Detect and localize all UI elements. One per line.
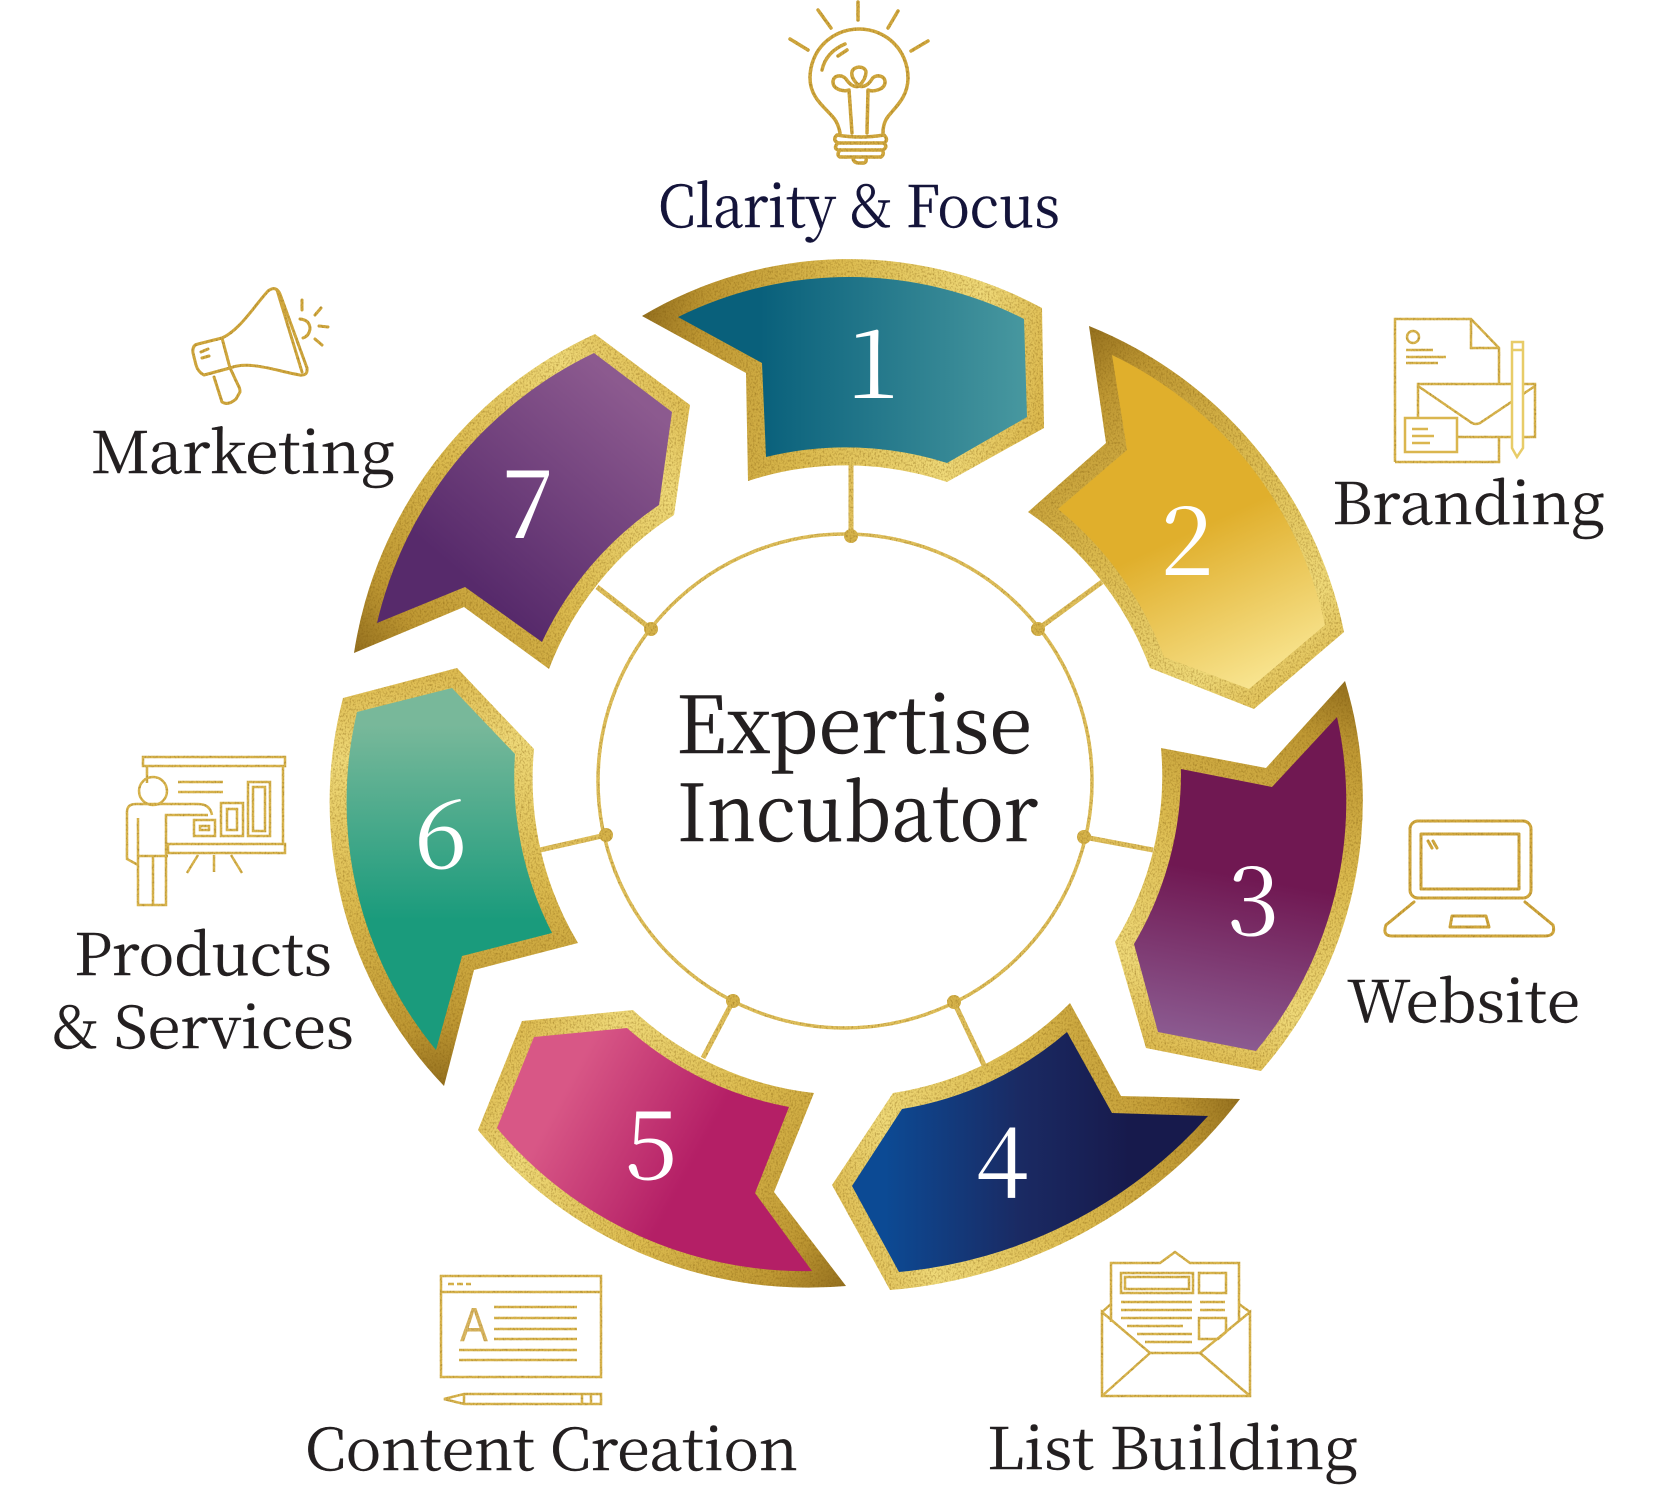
label: Clarity & Focus: Clarity & Focus: [658, 160, 1060, 244]
segment 6: green: 6: [415, 759, 467, 896]
label: Website: Website: [1347, 955, 1580, 1039]
segment 1: teal: 1: [847, 289, 899, 426]
segment 4: navy: 4: [976, 1087, 1028, 1224]
label: Products & Services: Products: [74, 908, 332, 992]
title: Expertise Incubator: Incubator: [677, 750, 1038, 864]
icon: laptop: [1385, 821, 1554, 936]
segment 5: magenta: [478, 1010, 846, 1288]
icon: presenter with chart: [127, 757, 285, 905]
icon: light bulb: [790, 2, 928, 163]
icon: document and pencil: A: [460, 1299, 488, 1352]
label: Branding: Branding: [1332, 457, 1605, 541]
segment 7: purple: 7: [502, 429, 554, 566]
segment 5: magenta: 5: [625, 1070, 677, 1207]
center hub ring with connectors: [540, 465, 1153, 1065]
label: Products & Services: & Services: [52, 981, 354, 1065]
icon: megaphone: [193, 289, 328, 403]
label: Marketing: Marketing: [91, 406, 395, 490]
icon: stationery for branding: [1395, 319, 1535, 462]
label: Products & Services: [52, 908, 354, 1065]
segment 3: plum: 3: [1227, 826, 1279, 963]
segment 4: navy: [832, 1003, 1240, 1290]
segment 7: purple: [354, 334, 690, 669]
icon: document and pencil: [441, 1276, 601, 1404]
title: Expertise Incubator: Expertise: [676, 662, 1032, 776]
label: Content Creation: Content Creation: [305, 1403, 798, 1487]
label: List Building: List Building: [987, 1402, 1358, 1486]
segment 2: gold: 2: [1161, 466, 1213, 603]
title: Expertise Incubator: [676, 662, 1038, 864]
segment 6: green: [330, 668, 578, 1086]
icon: open envelope with newsletter: [1102, 1252, 1250, 1396]
segment 1: teal: [642, 259, 1044, 482]
segment 3: plum: [1115, 681, 1363, 1071]
segment 2: gold: [1028, 326, 1344, 709]
